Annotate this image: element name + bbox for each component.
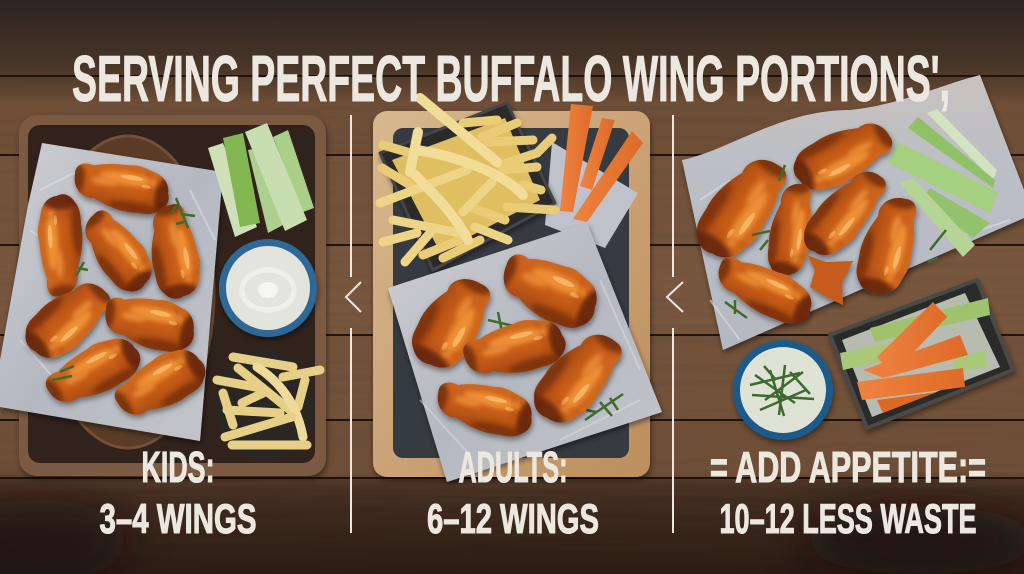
herb garnish <box>488 312 623 420</box>
fries bowl <box>215 350 315 460</box>
back parchment <box>545 142 638 248</box>
panel: kids portion <box>0 115 326 476</box>
container celery and carrots <box>840 298 990 413</box>
front parchment <box>388 223 662 482</box>
label: adults <box>427 443 599 542</box>
parchment paper <box>0 143 223 441</box>
label: add appetite <box>710 443 986 542</box>
carrot sticks <box>560 104 643 222</box>
kids wings <box>4 150 225 435</box>
panel: adults portion <box>373 98 662 482</box>
panel: appetite portion <box>674 75 1024 440</box>
french fries <box>380 98 555 262</box>
wooden tray with dark sheet pan <box>373 111 650 477</box>
label: kids: 3–4 WINGS <box>100 495 256 542</box>
label: adults: ADULTS: <box>458 443 568 492</box>
divider: left with chevron <box>346 115 361 533</box>
celery bundle <box>888 109 998 257</box>
adults wings <box>392 237 640 449</box>
ranch dip bowl <box>219 239 317 337</box>
wooden tray <box>19 115 326 476</box>
fry basket <box>380 103 555 270</box>
label: kids: KIDS: <box>142 443 214 492</box>
appetite wings <box>674 102 931 341</box>
parchment paper <box>682 75 1024 350</box>
celery sticks <box>208 123 314 237</box>
herb sprigs <box>725 165 946 318</box>
label: kids <box>100 443 256 542</box>
label: adults: 6–12 WINGS <box>427 495 599 542</box>
ranch dip with herbs <box>733 340 833 440</box>
divider: right with chevron <box>667 115 683 533</box>
snack container <box>830 280 1013 428</box>
fries <box>217 357 320 445</box>
parsley garnish <box>52 198 195 380</box>
